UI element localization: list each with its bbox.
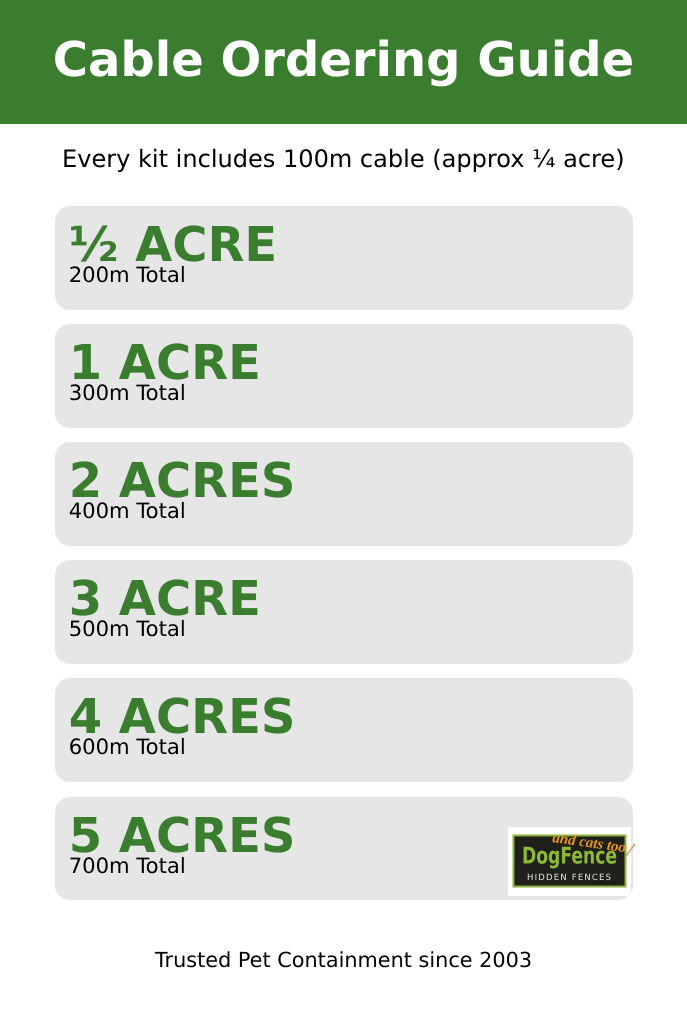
panel: 4 acres: 600m Total bbox=[69, 734, 186, 759]
panel: 3 acre bbox=[55, 560, 633, 664]
footer tagline: Trusted Pet Containment since 2003 bbox=[155, 948, 532, 972]
panel: half acre: 200m Total bbox=[69, 262, 186, 287]
logo: DogFence Hidden Fences bbox=[508, 827, 636, 896]
panel: 4 acres: 4 ACRES bbox=[69, 689, 296, 745]
panel: 2 acres: 400m Total bbox=[69, 498, 186, 523]
title: Cable Ordering Guide bbox=[53, 32, 634, 88]
panel: 5 acres: 5 ACRES bbox=[69, 808, 296, 864]
panel: half acre bbox=[55, 206, 633, 310]
panel: 2 acres bbox=[55, 442, 633, 546]
logo: DogFence Hidden Fences: and cats too bbox=[551, 830, 627, 856]
panel: 4 acres bbox=[55, 678, 633, 782]
subtitle: Every kit includes 100m cable (approx ¼ acre) bbox=[62, 145, 625, 173]
logo: DogFence Hidden Fences: HIDDEN FENCES bbox=[527, 873, 611, 883]
panel: 5 acres: 700m Total bbox=[69, 852, 186, 878]
panel: 2 acres: 2 ACRES bbox=[69, 453, 296, 509]
panel: 1 acre bbox=[55, 324, 633, 428]
panel: 3 acre: 500m Total bbox=[69, 616, 186, 641]
header banner bbox=[0, 0, 687, 124]
panel: 5 acres bbox=[55, 796, 633, 900]
panel: 1 acre: 300m Total bbox=[69, 380, 186, 405]
panel: half acre: ½ ACRE bbox=[69, 217, 277, 273]
panel: 3 acre: 3 ACRE bbox=[69, 571, 261, 627]
panel: 1 acre: 1 ACRE bbox=[69, 335, 261, 391]
